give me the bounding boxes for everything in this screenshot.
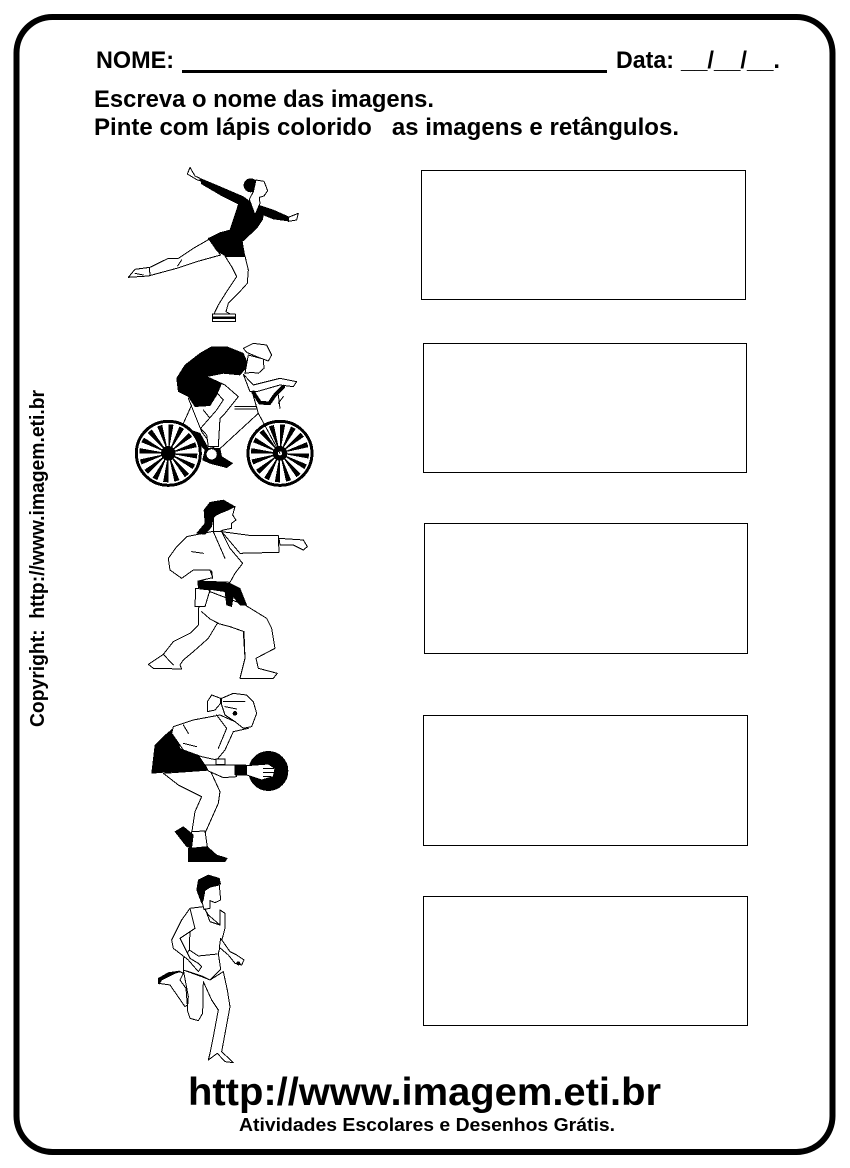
icon: cyclist	[136, 343, 312, 485]
instructions	[94, 86, 679, 141]
heading: name and date line	[96, 47, 780, 74]
answer box 5	[424, 896, 748, 1026]
icon: bowler	[152, 693, 288, 862]
answer box 4	[424, 716, 748, 846]
icon: figure skater	[128, 167, 298, 322]
instructions: Escreva o nome das imagens.	[94, 86, 434, 113]
heading: name and date line: __/__/__.	[680, 47, 780, 74]
heading: name and date line: NOME:	[96, 47, 174, 74]
icon: karate fighter	[148, 500, 307, 678]
instructions: Pinte com lápis colorido as imagens e retângulos.	[94, 114, 679, 141]
icon: runner	[158, 875, 244, 1063]
answer box 1	[422, 170, 746, 300]
footer url: http://www.imagem.eti.br	[188, 1071, 661, 1114]
answer box 3	[424, 524, 748, 654]
vertical copyright text: Copyright: http://www.imagem.eti.br	[27, 390, 49, 727]
footer tagline: Atividades Escolares e Desenhos Grátis.	[239, 1115, 615, 1135]
answer box 2	[424, 344, 746, 472]
heading: name and date line: Data:	[616, 47, 674, 74]
